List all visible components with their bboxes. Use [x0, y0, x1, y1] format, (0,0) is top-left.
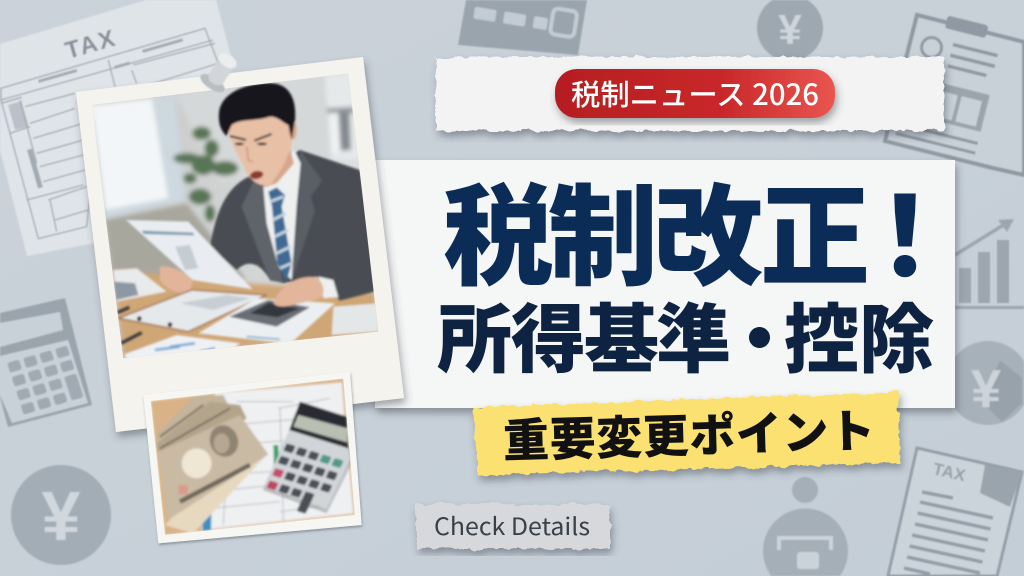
photo: surprised businessman at desk — [90, 70, 383, 367]
icon: yen coin left: ¥ — [42, 477, 81, 555]
news pill: 税制ニュース 2026 — [571, 72, 819, 114]
icon: calculator left — [0, 298, 92, 427]
main photo polaroid — [76, 57, 404, 432]
icon: tax form top left: TAX — [62, 24, 120, 65]
laptop — [113, 268, 167, 302]
icon: person with document — [763, 477, 848, 576]
icon: calculator top center — [458, 0, 587, 55]
icon: clipboard top right — [885, 10, 1024, 175]
torn paper banner — [436, 57, 944, 131]
icon: yen coin right — [946, 341, 1024, 425]
small photo polaroid: money and calculator — [143, 372, 362, 543]
clipboard and papers — [118, 290, 267, 332]
title panel — [375, 148, 960, 408]
check details button — [415, 504, 610, 549]
icon: pin — [198, 48, 242, 96]
calculator — [229, 300, 310, 327]
subtitle: 所得基準・控除 — [437, 279, 934, 388]
check details button: Check Details — [434, 507, 590, 542]
main title: 税制改正！ — [443, 148, 960, 308]
icon: yen coin right: ¥ — [971, 359, 1001, 419]
hand and cuff — [318, 277, 338, 298]
icon: yen coin top — [757, 0, 823, 61]
jacket — [210, 150, 375, 301]
icon: tax document bottom right: TAX — [931, 459, 968, 485]
icon: yen coin left — [11, 465, 111, 565]
icon: bar chart — [954, 219, 1024, 309]
icon: tax form top left — [0, 0, 232, 256]
icon: yen coin top: ¥ — [778, 6, 802, 53]
hair — [219, 83, 295, 139]
icon: tax document bottom right — [888, 448, 1022, 576]
face — [227, 107, 293, 186]
yellow tape banner: 重要変更ポイント — [502, 395, 876, 471]
document held — [126, 220, 253, 289]
